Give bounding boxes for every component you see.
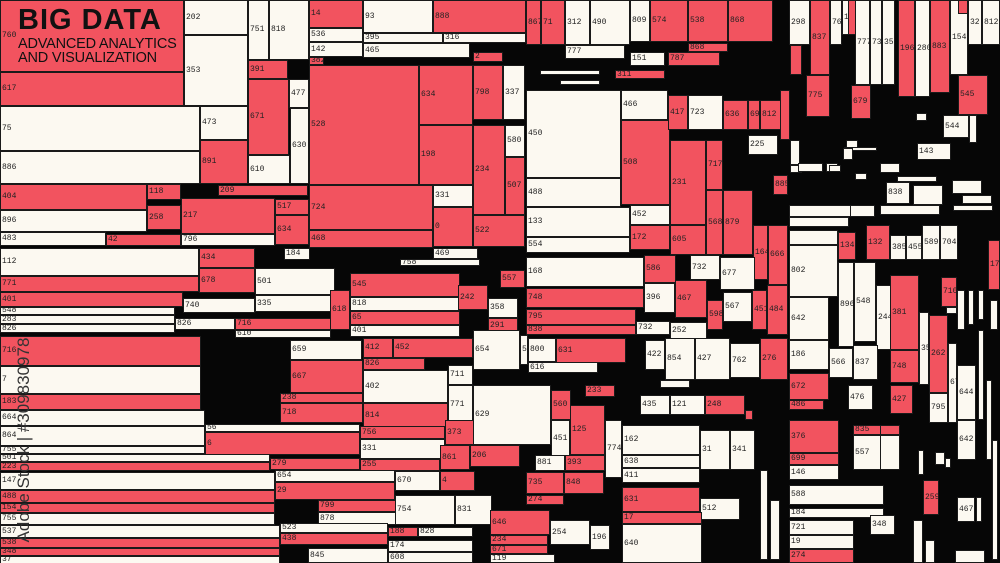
treemap: second column: 353 [186, 66, 200, 74]
treemap: right column: 486 [791, 400, 805, 409]
treemap: fourth column: 631 [558, 346, 572, 354]
treemap: second column: 217 [183, 211, 197, 220]
treemap: third column: 373 [447, 428, 461, 436]
treemap: right column: 76 [832, 18, 842, 26]
treemap: fourth column: 151 [632, 54, 646, 63]
treemap: third column: 724 [311, 202, 325, 212]
treemap: third column: 331 [362, 444, 376, 453]
treemap: right column: 795 [931, 403, 945, 412]
treemap: third column: 756 [362, 428, 376, 436]
treemap: third column: 188 [390, 527, 404, 536]
treemap: second column: 716 [237, 319, 251, 328]
treemap: third column: 291 [490, 321, 504, 330]
treemap: left column: 716 [2, 346, 16, 355]
treemap: fourth column: 274 [528, 495, 542, 504]
treemap: fourth column: 422 [647, 350, 661, 359]
treemap: third column: 0 [435, 222, 440, 231]
treemap: right column: 259 [925, 492, 939, 502]
treemap: third column: 412 [365, 343, 379, 352]
treemap: right column: 73 [872, 38, 882, 46]
treemap: right column: 545 [960, 90, 974, 99]
treemap: fourth column: 666 [770, 250, 784, 259]
treemap: fourth column: 168 [528, 267, 542, 276]
treemap: third column: 65 [352, 313, 362, 322]
title: ADVANCED ANALYTICS [18, 36, 177, 52]
treemap: left column: 617 [2, 84, 16, 93]
treemap: right column: 883 [932, 42, 946, 50]
treemap: right column: 588 [791, 490, 805, 499]
treemap: fourth column: 598 [709, 310, 723, 319]
treemap: third column: 358 [490, 303, 504, 312]
treemap: fourth column: 732 [692, 262, 706, 272]
treemap: right column: 146 [791, 468, 805, 476]
treemap: fourth column: 17 [624, 513, 634, 522]
treemap: third column: 528 [311, 120, 325, 129]
treemap: second column: 438 [282, 534, 296, 543]
treemap: fourth column: 196 [592, 532, 606, 542]
treemap: right column: 775 [808, 91, 822, 100]
treemap: third column: 93 [365, 12, 375, 20]
treemap: right column: 455 [908, 242, 922, 252]
treemap: second column: 630 [292, 141, 306, 150]
treemap: third column: 142 [311, 44, 325, 54]
treemap: left column: 401 [2, 294, 16, 304]
treemap: right column: 274 [791, 551, 805, 560]
treemap: fourth column: 636 [725, 110, 739, 119]
treemap: right column: 154 [952, 32, 966, 42]
treemap: third column: 234 [475, 165, 489, 174]
treemap: fourth column: 640 [624, 538, 638, 548]
treemap: third column: 629 [475, 410, 489, 419]
treemap: right column: 748 [892, 362, 906, 370]
treemap: right column: 642 [959, 435, 973, 444]
treemap: fourth column: 787 [670, 54, 684, 63]
treemap: left column: 112 [2, 257, 16, 266]
treemap: right column: 721 [791, 522, 805, 532]
treemap: second column: 501 [257, 276, 271, 286]
treemap: second column: 826 [177, 319, 191, 328]
treemap: fourth column: 276 [762, 354, 776, 363]
treemap: right column: 348 [872, 520, 886, 529]
treemap: fourth column: 417 [670, 108, 684, 116]
treemap: third column: 4 [442, 476, 447, 485]
treemap: third column: 654 [475, 345, 489, 354]
treemap: third column: 888 [435, 12, 449, 20]
treemap: left column: 664 [2, 413, 16, 422]
treemap: third column: 814 [365, 410, 379, 420]
treemap: second column: 610 [250, 164, 264, 174]
treemap: fourth column: 484 [769, 305, 783, 314]
treemap: fourth column: 71 [543, 18, 553, 26]
treemap: third column: 646 [492, 518, 506, 526]
treemap: fourth column: 427 [697, 354, 711, 363]
treemap: right column: 644 [959, 388, 973, 396]
treemap: third column: 828 [420, 527, 434, 536]
treemap: second column: 654 [277, 471, 291, 480]
treemap: left column: 755 [2, 514, 16, 523]
treemap: left column: 183 [2, 397, 16, 406]
treemap: fourth column: 795 [528, 312, 542, 321]
treemap: left column: 404 [2, 192, 16, 201]
treemap: right column: 143 [919, 146, 933, 156]
treemap: fourth column: 490 [592, 18, 606, 26]
treemap: third column: 206 [472, 451, 486, 460]
treemap: third column: 234 [492, 535, 506, 544]
treemap: third column: 174 [390, 541, 404, 550]
treemap: fourth column: 121 [672, 400, 686, 409]
treemap: third column: 670 [397, 476, 411, 485]
treemap: third column: 468 [311, 234, 325, 243]
treemap: left column: 864 [2, 431, 16, 440]
treemap: third column: 401 [352, 326, 366, 335]
treemap: left column: 886 [2, 162, 16, 172]
treemap: second column: 671 [250, 112, 264, 121]
treemap: fourth column: 800 [530, 345, 544, 354]
treemap: second column: 845 [310, 550, 324, 560]
treemap: fourth column: 838 [528, 325, 542, 334]
treemap: right column: 544 [945, 122, 959, 130]
treemap: fourth column: 162 [624, 435, 638, 444]
treemap: fourth column: 466 [623, 100, 637, 109]
treemap: fourth column: 341 [732, 445, 746, 454]
treemap: third column: 536 [311, 30, 325, 39]
treemap: fourth column: 512 [702, 504, 716, 513]
treemap: third column: 580 [507, 136, 521, 145]
treemap: fourth column: 567 [725, 302, 739, 311]
treemap: fourth column: 723 [690, 108, 704, 116]
treemap: left column: 896 [2, 216, 16, 225]
treemap: left column: 75 [2, 124, 12, 132]
treemap: fourth column: 574 [652, 16, 666, 25]
treemap: third column: 337 [505, 88, 519, 96]
treemap: right column: 427 [892, 394, 906, 404]
treemap: third column: 452 [395, 343, 409, 352]
treemap: second column: 279 [272, 459, 286, 468]
treemap: left column: 760 [2, 31, 16, 40]
treemap: third column: 771 [450, 400, 464, 409]
treemap: fourth column: 452 [632, 210, 646, 219]
treemap: right column: 476 [850, 392, 864, 402]
treemap: right column: 557 [855, 448, 869, 456]
treemap: left column: 538 [2, 538, 16, 547]
treemap: fourth column: 848 [566, 478, 580, 487]
treemap: fourth column: 231 [672, 178, 686, 186]
treemap: fourth column: 879 [725, 218, 739, 226]
treemap: third column: 798 [475, 88, 489, 96]
treemap: fourth column: 312 [567, 18, 581, 26]
treemap: right column: 376 [791, 432, 805, 440]
treemap: left column: 771 [2, 279, 16, 288]
treemap: fourth column: 568 [708, 218, 722, 226]
treemap: right column: 262 [931, 349, 945, 358]
treemap: fourth column: 554 [528, 240, 542, 249]
treemap: fourth column: 868 [730, 16, 744, 25]
treemap: third column: 316 [445, 33, 459, 42]
treemap: fourth column: 451 [553, 434, 567, 443]
treemap: fourth column: 762 [732, 356, 746, 364]
treemap: second column: 202 [186, 12, 200, 22]
treemap: fourth column: 586 [646, 264, 660, 273]
treemap: left column: 258 [149, 212, 163, 222]
treemap: right column: 566 [831, 358, 845, 367]
treemap: fourth column: 450 [528, 129, 542, 138]
treemap: fourth column: 854 [667, 354, 681, 363]
treemap: fourth column: 172 [632, 232, 646, 242]
treemap: second column: 718 [282, 408, 296, 417]
treemap: left column: 42 [108, 235, 118, 244]
treemap: left column: 678 [201, 276, 215, 284]
treemap: fourth column: 396 [646, 293, 660, 302]
treemap: right column: 132 [868, 238, 882, 246]
treemap: third column: 198 [421, 150, 435, 159]
treemap: second column: 517 [277, 202, 291, 211]
treemap: second column: 751 [250, 25, 264, 34]
treemap: right column: 17 [990, 260, 1000, 269]
treemap: third column: 618 [332, 305, 346, 314]
title [18, 4, 177, 66]
treemap: second column: 238 [282, 393, 296, 402]
treemap: right column: 186 [791, 350, 805, 359]
treemap: fourth column: 488 [528, 188, 542, 196]
treemap: right column: 196 [900, 44, 914, 52]
treemap: left column: 483 [2, 234, 16, 243]
treemap: third column: 522 [475, 226, 489, 235]
treemap: fourth column: 252 [672, 326, 686, 334]
treemap: right column: 35 [884, 38, 894, 46]
treemap: fourth column: 31 [702, 445, 712, 454]
treemap: third column: 831 [457, 505, 471, 514]
treemap: fourth column: 225 [750, 140, 764, 149]
treemap: right column: 812 [984, 18, 998, 26]
treemap: right column: 802 [791, 266, 805, 275]
treemap: right column: 32 [970, 18, 980, 26]
treemap: third column: 557 [502, 274, 516, 283]
treemap: right column: 385 [892, 242, 906, 252]
treemap: left column: 537 [2, 526, 16, 536]
treemap: fourth column: 467 [677, 294, 691, 303]
treemap: second column: 391 [250, 64, 264, 74]
treemap: fourth column: 809 [632, 16, 646, 25]
treemap: fourth column: 881 [537, 458, 551, 467]
treemap: right column: 381 [892, 308, 906, 316]
treemap: right column: 837 [855, 358, 869, 366]
treemap: fourth column: 435 [642, 400, 656, 409]
watermark text: Adobe Stock | #309830978 [14, 338, 33, 542]
treemap: right column: 679 [853, 97, 867, 106]
treemap: second column: 799 [320, 501, 334, 510]
treemap: right column: 184 [791, 508, 805, 517]
treemap: fourth column: 748 [528, 293, 542, 302]
treemap: second column: 335 [257, 298, 271, 308]
treemap: fourth column: 774 [607, 444, 621, 453]
treemap: right column: 896 [840, 300, 854, 308]
treemap: third column: 255 [362, 460, 376, 469]
treemap: right column: 19 [791, 537, 801, 546]
treemap: second column: 659 [292, 345, 306, 354]
treemap: fourth column: 560 [553, 400, 567, 409]
treemap: third column: 465 [365, 46, 379, 54]
treemap: left column: 434 [201, 253, 215, 262]
treemap: fourth column: 812 [762, 110, 776, 119]
treemap: fourth column: 133 [528, 217, 542, 226]
treemap: right column: 298 [791, 18, 805, 26]
treemap: fourth column: 248 [707, 400, 721, 409]
treemap: left column: 118 [149, 187, 163, 196]
treemap: third column: 14 [311, 9, 321, 18]
treemap: second column: 891 [202, 157, 216, 166]
treemap: fourth column: 735 [528, 478, 542, 487]
treemap: third column: 545 [352, 280, 366, 289]
treemap: third column: 331 [435, 191, 449, 200]
treemap: fourth column: 605 [672, 235, 686, 244]
treemap: right column: 548 [856, 297, 870, 306]
treemap: second column: 878 [320, 514, 334, 522]
treemap: right column: 837 [812, 32, 826, 42]
treemap: right column: 838 [888, 188, 902, 197]
treemap: fourth column: 717 [708, 160, 722, 169]
treemap: third column: 2 [475, 52, 480, 61]
treemap: right column: 835 [855, 425, 869, 434]
treemap: second column: 523 [282, 523, 296, 532]
treemap: fourth column: 125 [572, 425, 586, 434]
treemap: third column: 826 [365, 359, 379, 368]
treemap: right column: 589 [924, 238, 938, 246]
treemap: second column: 740 [185, 300, 199, 310]
treemap: fourth column: 233 [587, 386, 601, 395]
treemap: right column: 704 [942, 238, 956, 246]
treemap: left column: 147 [2, 476, 16, 485]
treemap: right column: 467 [959, 504, 973, 514]
treemap: fourth column: 638 [624, 456, 638, 466]
treemap: left column: 7 [2, 375, 7, 384]
treemap: fourth column: 777 [567, 47, 581, 56]
treemap: second column: 209 [220, 186, 234, 194]
treemap: third column: 711 [450, 370, 464, 379]
treemap: right column: 710 [943, 287, 957, 296]
treemap: fourth column: 732 [638, 323, 652, 332]
treemap: second column: 6 [207, 438, 212, 448]
treemap: second column: 184 [286, 249, 300, 258]
treemap: third column: 861 [442, 452, 456, 462]
treemap: right column: 672 [791, 382, 805, 390]
treemap: fourth column: 538 [690, 16, 704, 25]
treemap: third column: 634 [421, 90, 435, 99]
treemap: fourth column: 631 [624, 494, 638, 504]
title: AND VISUALIZATION [18, 50, 157, 66]
treemap: right column: 642 [791, 314, 805, 322]
treemap: fourth column: 393 [567, 458, 581, 467]
treemap: third column: 402 [365, 382, 379, 390]
treemap: third column: 395 [365, 33, 379, 42]
treemap: third column: 242 [460, 292, 474, 302]
treemap: third column: 507 [507, 181, 521, 190]
treemap: third column: 608 [390, 552, 404, 562]
treemap: second column: 473 [202, 118, 216, 127]
treemap: fourth column: 254 [552, 528, 566, 536]
treemap: left column: 488 [2, 492, 16, 500]
treemap: third column: 818 [352, 299, 366, 308]
treemap: fourth column: 508 [623, 158, 637, 166]
treemap: second column: 634 [277, 225, 291, 234]
treemap: fourth column: 677 [722, 268, 736, 278]
treemap: second column: 818 [271, 25, 285, 34]
treemap: third column: 469 [435, 248, 449, 258]
title: BIG DATA [18, 4, 162, 36]
treemap: second column: 796 [183, 235, 197, 244]
treemap: second column: 29 [277, 486, 287, 495]
treemap: second column: 477 [291, 88, 305, 98]
treemap: third column: 754 [397, 505, 411, 514]
treemap: left column: 154 [2, 503, 16, 512]
treemap: fourth column: 411 [624, 470, 638, 480]
treemap: right column: 134 [840, 241, 854, 250]
treemap: second column: 667 [292, 372, 306, 380]
treemap: right column: 699 [791, 454, 805, 463]
treemap: fourth column: 616 [530, 362, 544, 372]
